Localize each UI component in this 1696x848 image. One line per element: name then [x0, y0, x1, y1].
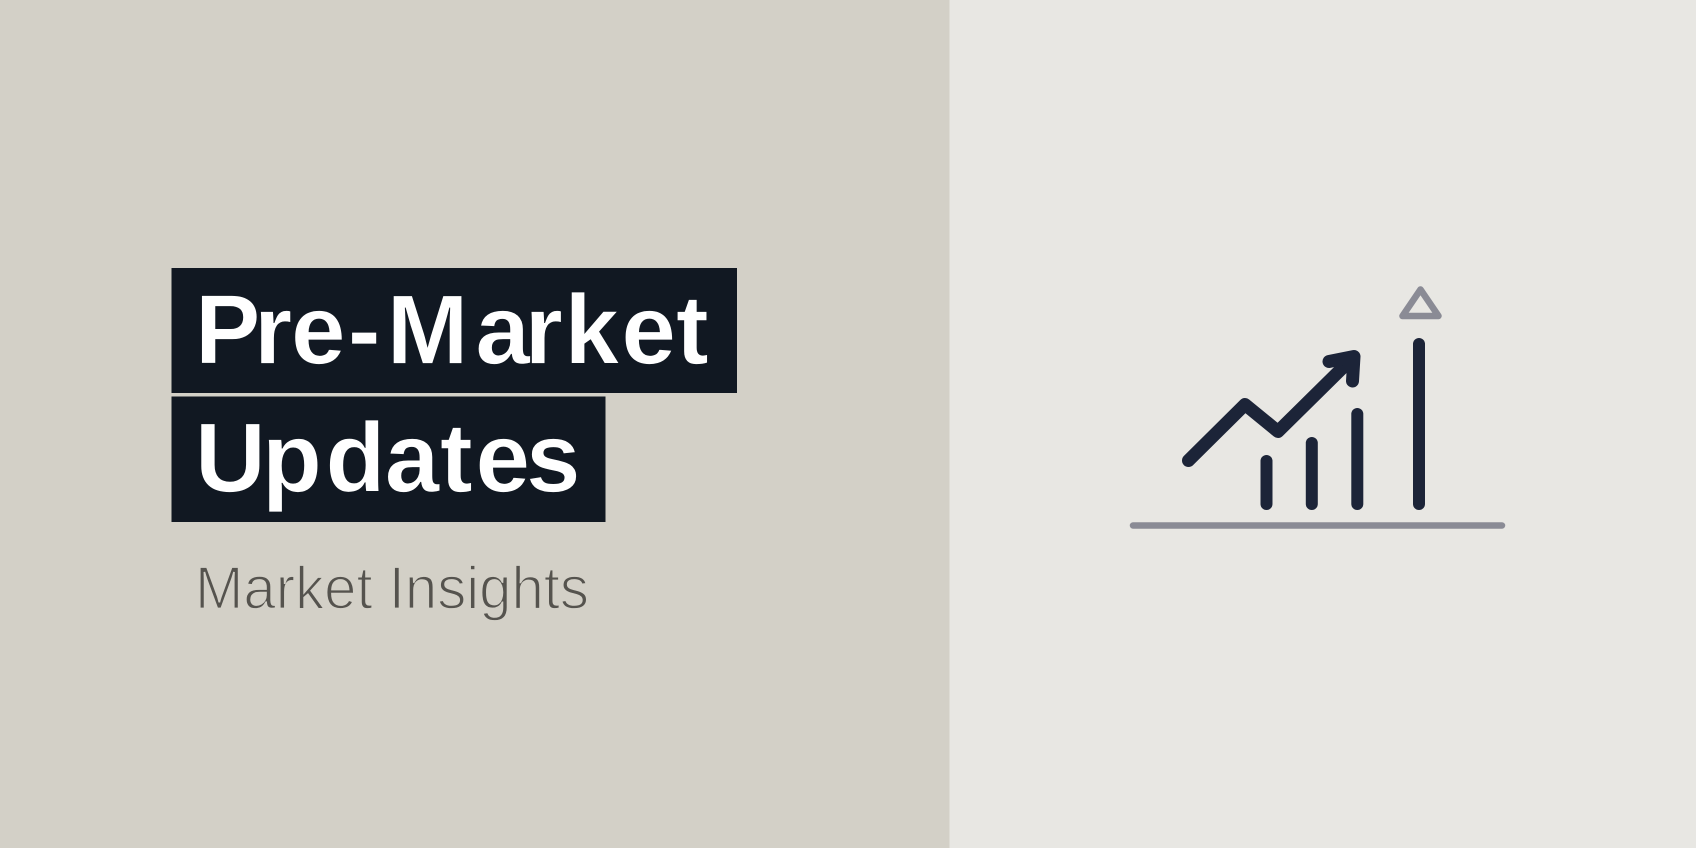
- trend arrow: [1188, 356, 1354, 460]
- panel: right background: [950, 0, 1696, 848]
- title block: [172, 268, 737, 522]
- icon: rising chart: [1133, 290, 1502, 526]
- bar chart columns: [1266, 344, 1419, 504]
- subtitle: Market Insights: [195, 554, 589, 621]
- title line 1: Pre-Market: Pre-Market: [195, 275, 709, 385]
- title line 2: Updates: Updates: [195, 402, 581, 512]
- icon: small triangle: [1402, 290, 1438, 316]
- panel: left background: [0, 0, 950, 848]
- chart baseline: [1133, 522, 1502, 529]
